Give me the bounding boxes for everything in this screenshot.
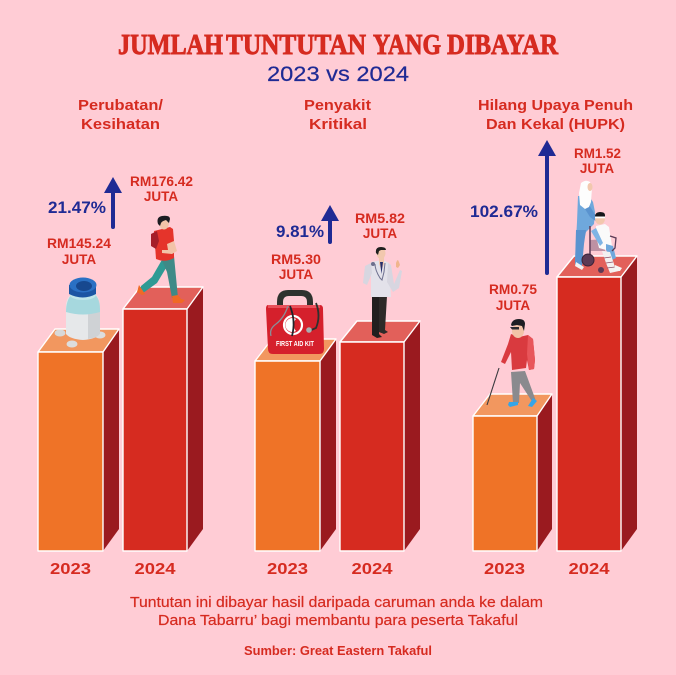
bar: Penyakit 2023 xyxy=(255,339,336,551)
bar: HUPK 2024 xyxy=(557,256,637,551)
value: RM176.42: RM176.42 xyxy=(130,174,193,189)
value: RM145.24 xyxy=(47,236,111,267)
value: RM0.75: RM0.75 xyxy=(489,282,537,297)
heading: Perubatan/Kesihatan: Kesihatan xyxy=(81,116,160,133)
icon: runner xyxy=(137,216,185,303)
value: RM145.24: JUTA xyxy=(62,252,96,267)
bar: Perubatan 2023 xyxy=(38,329,119,551)
year labels: 2023 xyxy=(50,561,91,578)
value: RM0.75 xyxy=(489,282,537,313)
value: RM1.52 xyxy=(574,146,621,176)
heading: HUPK: Dan Kekal (HUPK) xyxy=(486,116,625,133)
year labels: 2024 xyxy=(352,561,393,578)
value: RM5.82: JUTA xyxy=(363,226,397,241)
bar: Penyakit 2024 xyxy=(340,321,420,551)
year labels: 2023 xyxy=(267,561,308,578)
icon: blind man xyxy=(487,319,537,407)
icon: doctor xyxy=(363,247,402,338)
title: TUNTUTAN xyxy=(226,30,366,61)
bar: HUPK 2023 xyxy=(473,394,552,551)
title: DIBAYAR xyxy=(447,30,559,61)
value: RM5.82 xyxy=(355,211,405,241)
value: RM145.24: RM145.24 xyxy=(47,236,111,251)
icon: nurse and wheelchair xyxy=(575,181,622,273)
value: RM176.42 xyxy=(130,174,193,204)
percent: 102.67%: 102.67% xyxy=(470,203,538,221)
title: YANG xyxy=(373,30,441,61)
icon: first aid kit: FIRST AID KIT xyxy=(276,339,314,348)
heading: Penyakit Kritikal xyxy=(304,97,371,133)
subtitle: 2023 vs 2024 xyxy=(267,63,409,86)
value: RM176.42: JUTA xyxy=(144,189,178,204)
footer text: Dana Tabarru’ bagi membantu para peserta Takaful xyxy=(158,613,518,629)
heading: HUPK xyxy=(478,97,633,133)
heading: Perubatan/Kesihatan: Perubatan/ xyxy=(78,97,164,114)
footer text: Tuntutan ini dibayar hasil daripada caruman anda ke dalam xyxy=(130,595,543,611)
heading: Penyakit Kritikal: Kritikal xyxy=(309,116,367,133)
value: RM1.52: RM1.52 xyxy=(574,146,621,161)
year labels xyxy=(50,561,610,578)
title: JUMLAH xyxy=(118,30,223,61)
source: Sumber: Great Eastern Takaful xyxy=(244,644,432,658)
icon: medicine bottle xyxy=(54,278,106,348)
title xyxy=(118,30,559,61)
footer text xyxy=(130,595,543,629)
year labels: 2023 xyxy=(484,561,525,578)
value: RM5.30: JUTA xyxy=(279,267,313,282)
value: RM5.82: RM5.82 xyxy=(355,211,405,226)
arrow: 9.81% xyxy=(321,205,339,244)
percent: 21.47%: 21.47% xyxy=(48,199,106,217)
percent: 9.81%: 9.81% xyxy=(276,223,324,241)
value: RM0.75: JUTA xyxy=(496,298,530,313)
heading: Penyakit Kritikal: Penyakit xyxy=(304,97,371,114)
value: RM5.30: RM5.30 xyxy=(271,252,321,267)
heading: Perubatan/Kesihatan xyxy=(78,97,164,133)
arrow: 21.47% xyxy=(104,177,122,229)
icon: first aid kit xyxy=(266,290,324,354)
value: RM1.52: JUTA xyxy=(580,161,614,176)
bar: Perubatan 2024 xyxy=(123,287,203,551)
arrow: 102.67% xyxy=(538,140,556,275)
year labels: 2024 xyxy=(134,561,176,578)
value: RM5.30 xyxy=(271,252,321,282)
heading: HUPK: Hilang Upaya Penuh xyxy=(478,97,633,114)
year labels: 2024 xyxy=(568,561,610,578)
